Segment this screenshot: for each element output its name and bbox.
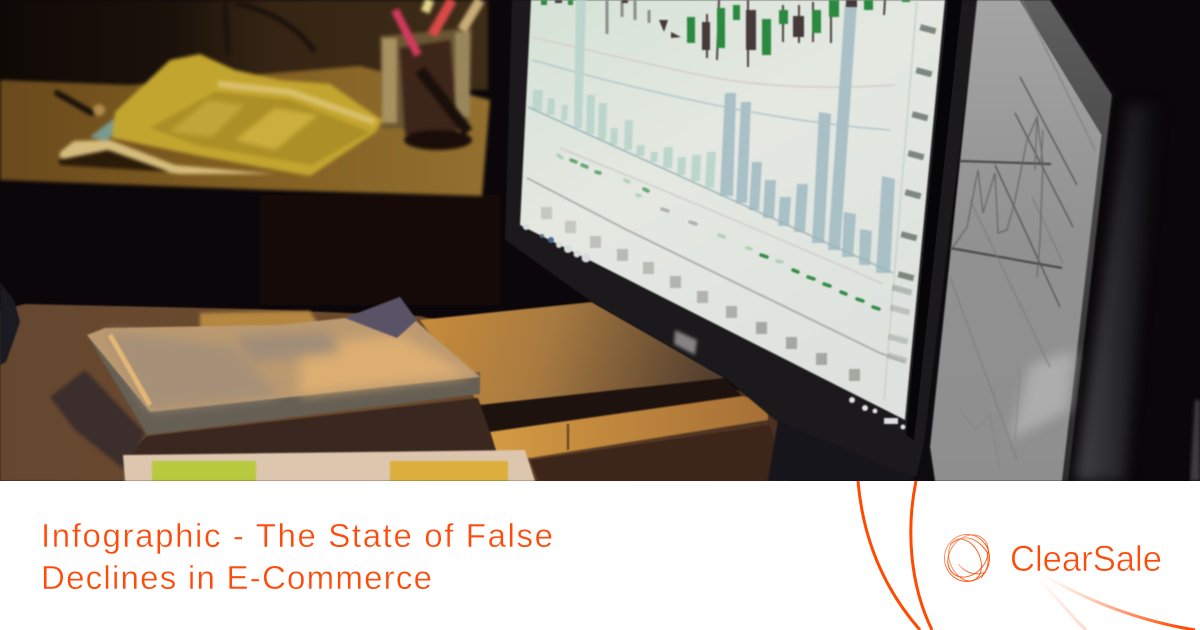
title: Declines in E-Commerce (41, 559, 432, 596)
second monitor (915, 0, 1115, 481)
date labels (541, 207, 860, 381)
desk front shadow (125, 398, 530, 458)
back wall (0, 0, 488, 90)
background (0, 0, 1200, 481)
decorative arc left (858, 481, 920, 630)
dark desk corner (530, 425, 785, 481)
notebook shadow (50, 370, 145, 470)
dark object at left edge (0, 282, 20, 365)
wall cable (225, 0, 315, 55)
monitor frame (915, 0, 1115, 481)
folded blue corner (345, 297, 417, 338)
icon: woven rings (939, 527, 997, 586)
upper desk with book and pencil jar (0, 0, 490, 196)
tablet on desk (375, 302, 768, 458)
main monitor (505, 0, 978, 478)
under-desk tint (260, 195, 500, 305)
decorative faint arc (1038, 578, 1086, 630)
stack of notebooks (87, 297, 480, 435)
jar shadow (404, 130, 472, 150)
book inner page (150, 92, 370, 165)
monitor stand at right (1075, 105, 1158, 481)
volume baseline (528, 107, 893, 273)
pencils (395, 10, 418, 55)
pen (57, 93, 92, 113)
moving average lines (532, 37, 895, 87)
price labels (887, 24, 936, 363)
rear edge (1020, 0, 1112, 481)
lower desk (0, 304, 790, 481)
bright reflection (1010, 350, 1075, 440)
wordmark: ClearSale (1010, 538, 1162, 579)
sloped chart lines (950, 0, 1095, 470)
screen (520, 0, 945, 420)
desk highlight behind notebook (200, 311, 320, 332)
lower indicator lines (527, 178, 905, 362)
price axis (884, 0, 917, 400)
paper strip at bottom (123, 450, 535, 481)
book top rim (218, 84, 375, 122)
pencil jar (380, 28, 472, 130)
monitor stand (768, 420, 915, 481)
photo: trading desk with monitors (0, 0, 1200, 481)
screen face (930, 0, 1102, 481)
volume bar chart (532, 0, 895, 273)
ClearSale logo (939, 527, 1162, 586)
title: Infographic - The State of False (41, 517, 553, 554)
decorative arc bottom right (1040, 573, 1195, 630)
blue book corner (90, 116, 124, 141)
taskbar icons right (849, 397, 906, 430)
indicator dashes (558, 155, 879, 309)
lower book page (60, 140, 275, 174)
monitor bezel (505, 0, 978, 478)
bottom banner (41, 481, 1196, 630)
decorative arc right (911, 481, 932, 630)
candlestick chart (541, 0, 910, 67)
taskbar icons left (523, 224, 590, 262)
price trace (953, 117, 1043, 277)
title (41, 517, 553, 596)
book stripes (235, 108, 318, 150)
monitor logo (674, 330, 697, 355)
open yellow book (112, 54, 382, 176)
